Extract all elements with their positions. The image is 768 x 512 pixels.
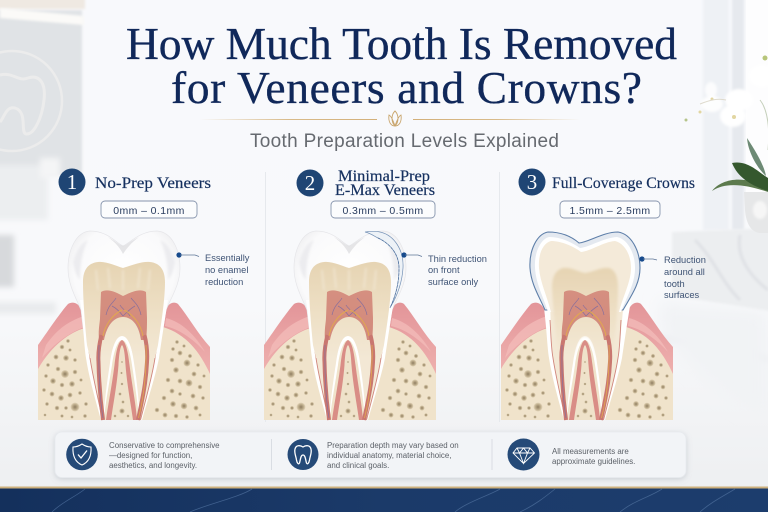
tooth diagram 3 with prepared crown <box>501 232 673 420</box>
number badge 1: 1 <box>67 170 77 194</box>
icon: shield with check <box>66 439 98 470</box>
heading: full-coverage crowns: Full-Coverage Crowns <box>552 175 695 192</box>
measurement pill: 0.3mm to 0.5mm <box>331 201 435 218</box>
callout: thin reduction on front surface only: Thin reduction <box>428 254 487 264</box>
heading: minimal-prep e-max veneers: Minimal-Prep <box>338 168 430 185</box>
callout: thin reduction on front surface only: surface only <box>428 277 478 287</box>
callout: thin reduction on front surface only <box>401 252 487 287</box>
panel: no-prep veneers <box>38 168 250 420</box>
note: preparation depth: and clinical goals. <box>327 461 389 470</box>
gold divider with lotus icon <box>200 111 580 126</box>
prepared tooth <box>535 237 635 312</box>
column dividers <box>265 172 500 422</box>
tooth diagram 1 <box>38 231 210 420</box>
footer note panel <box>55 432 686 478</box>
measurement pill: 1.5mm to 2.5mm: 1.5mm – 2.5mm <box>569 205 651 217</box>
number badge 2: 2 <box>305 171 315 195</box>
measurement pill: 0mm to 0.1mm <box>101 201 197 218</box>
note: conservative to comprehensive: Conservative to comprehensive <box>109 441 220 450</box>
callout: thin reduction on front surface only: on front <box>428 265 460 275</box>
blurred clinic wall with tooth logo <box>0 0 85 314</box>
number badge 1 <box>58 168 86 196</box>
blurred window and marble counter <box>672 0 768 312</box>
callout: reduction around all tooth surfaces: surfaces <box>664 290 699 300</box>
note: preparation depth: individual anatomy, material choice, <box>327 451 451 460</box>
note: conservative to comprehensive: aesthetics, and longevity. <box>109 461 197 470</box>
callout: essentially no enamel reduction: no enamel <box>205 265 248 275</box>
title: for Veneers and Crowns? <box>171 62 642 113</box>
crown outline <box>530 232 640 310</box>
callout: reduction around all tooth surfaces: around all <box>664 267 705 277</box>
icon: diamond <box>508 438 540 470</box>
callout: essentially no enamel reduction: Essentially <box>205 253 250 263</box>
callout: reduction around all tooth surfaces <box>639 255 706 300</box>
tooth diagram 2 with thin front reduction <box>264 231 436 420</box>
callout: reduction around all tooth surfaces: Reduction <box>664 255 706 265</box>
panel: minimal-prep e-max veneers <box>264 168 487 420</box>
heading: no-prep veneers: No-Prep Veneers <box>95 175 211 192</box>
measurement pill: 0mm to 0.1mm: 0mm – 0.1mm <box>113 205 185 217</box>
heading: minimal-prep e-max veneers <box>335 168 435 199</box>
title: How Much Tooth Is Removed <box>126 18 677 69</box>
note: approximate guidelines: All measurements are <box>552 447 629 456</box>
note: conservative to comprehensive: —designed for function, <box>109 451 192 460</box>
number badge 3: 3 <box>527 170 537 194</box>
note: approximate guidelines: approximate guidelines. <box>552 457 635 466</box>
icon: tooth <box>288 439 318 470</box>
title <box>126 18 677 113</box>
note: preparation depth: Preparation depth may vary based on <box>327 441 459 450</box>
subtitle: Tooth Preparation Levels Explained <box>250 131 559 152</box>
callout: reduction around all tooth surfaces: tooth <box>664 279 685 289</box>
navy marble footer band <box>0 488 768 512</box>
number badge 2 <box>296 170 324 196</box>
panel: full-coverage crowns <box>501 168 706 420</box>
number badge 3 <box>518 168 546 196</box>
measurement pill: 0.3mm to 0.5mm: 0.3mm – 0.5mm <box>342 205 424 217</box>
removed veneer layer <box>365 231 403 308</box>
callout: essentially no enamel reduction <box>176 252 250 287</box>
gold rule <box>0 486 768 488</box>
callout: essentially no enamel reduction: reduction <box>205 277 243 287</box>
measurement pill: 1.5mm to 2.5mm <box>560 201 660 218</box>
heading: minimal-prep e-max veneers: E-Max Veneers <box>335 182 435 199</box>
orchid plant in white vase <box>684 56 768 233</box>
